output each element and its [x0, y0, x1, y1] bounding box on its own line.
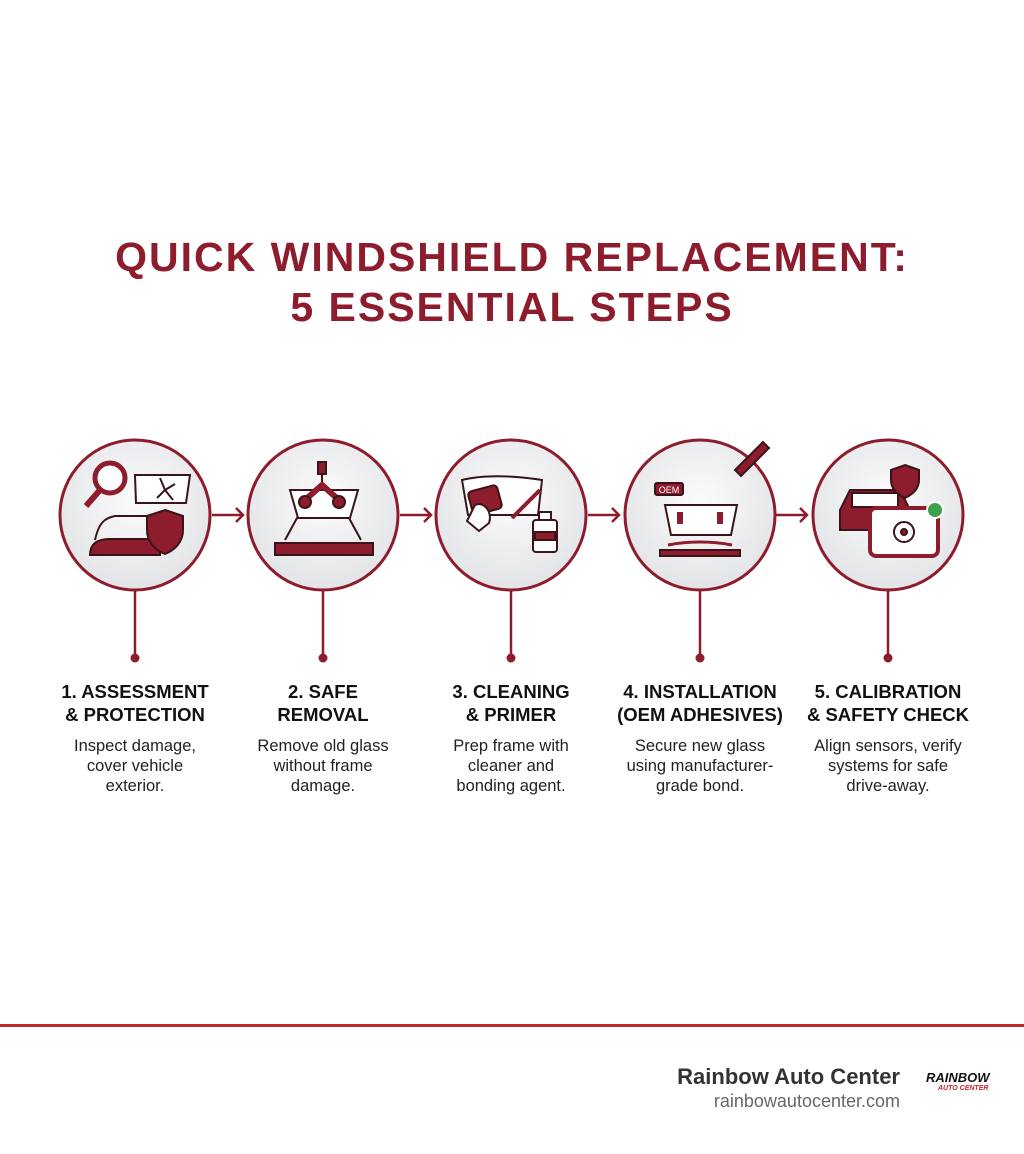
step 5 text: Align sensors, verify: [814, 737, 962, 755]
icon 3: cleaning: [462, 476, 557, 552]
step 2 text: without frame: [273, 757, 373, 775]
step 1 text: Inspect damage,: [74, 737, 196, 755]
step 3 text: cleaner and: [468, 757, 554, 775]
footer brand text: [677, 1064, 900, 1111]
connector lines: [135, 590, 888, 658]
footer logo: [926, 1070, 990, 1092]
arrows: [212, 508, 807, 522]
icon 2: removal: [275, 462, 373, 555]
step 3 text: Prep frame with: [453, 737, 569, 755]
icon 4: installation: [655, 442, 769, 556]
step 4 text: [617, 681, 783, 795]
icon circles: [60, 440, 963, 590]
footer logo: RAINBOW: [926, 1070, 990, 1085]
step 1 text: exterior.: [106, 777, 164, 795]
step 4 text: Secure new glass: [635, 737, 765, 755]
step 3 text: [452, 681, 570, 795]
footer logo: AUTO CENTER: [938, 1085, 988, 1092]
step 3 text: 3. CLEANING: [452, 681, 570, 702]
title: QUICK WINDSHIELD REPLACEMENT:: [115, 234, 909, 280]
step 1 text: [61, 681, 209, 795]
process diagram: [58, 438, 964, 662]
step 4 text: 4. INSTALLATION: [623, 681, 777, 702]
step 5 text: drive-away.: [846, 777, 930, 795]
icon 4: installation: OEM: [659, 485, 679, 495]
step 2 text: damage.: [291, 777, 355, 795]
step 1 text: cover vehicle: [87, 757, 183, 775]
step 1 text: 1. ASSESSMENT: [61, 681, 209, 702]
title: 5 ESSENTIAL STEPS: [290, 284, 734, 330]
step 3 text: & PRIMER: [466, 704, 556, 725]
footer brand text: Rainbow Auto Center: [677, 1064, 900, 1089]
footer divider: [0, 1024, 1024, 1027]
step 2 text: [257, 681, 389, 795]
step 5 text: [807, 681, 969, 795]
step 4 text: using manufacturer-: [627, 757, 773, 775]
footer brand text: rainbowautocenter.com: [714, 1091, 900, 1111]
step 5 text: 5. CALIBRATION: [815, 681, 961, 702]
icon 1: magnifier, cracked glass, car, shield: [86, 463, 190, 555]
step 1 text: & PROTECTION: [65, 704, 205, 725]
step 4 text: (OEM ADHESIVES): [617, 704, 783, 725]
step 3 text: bonding agent.: [456, 777, 566, 795]
step 5 text: & SAFETY CHECK: [807, 704, 969, 725]
title: [115, 234, 909, 330]
step 2 text: Remove old glass: [257, 737, 389, 755]
icon 5: calibration: [840, 465, 943, 556]
step 2 text: REMOVAL: [277, 704, 369, 725]
step 2 text: 2. SAFE: [288, 681, 358, 702]
step 5 text: systems for safe: [828, 757, 948, 775]
step 4 text: grade bond.: [656, 777, 744, 795]
